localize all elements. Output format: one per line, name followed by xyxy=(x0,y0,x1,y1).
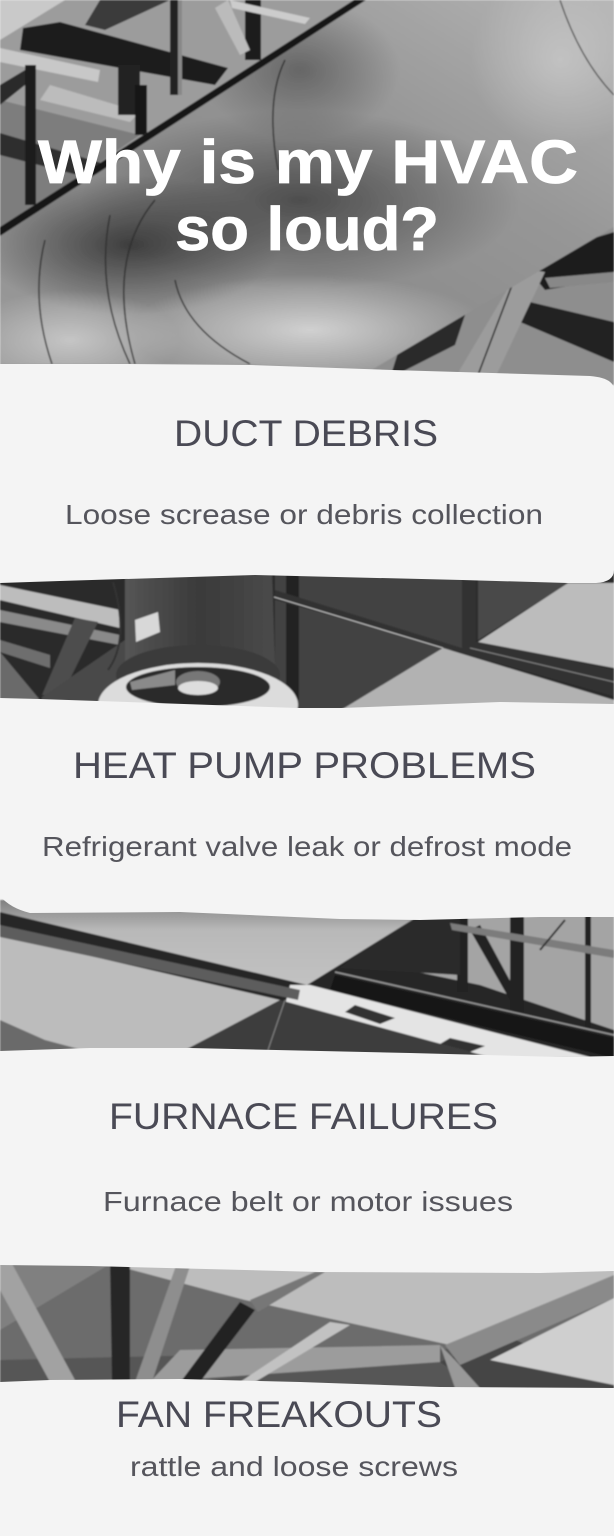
heading: duct debris: DUCT DEBRIS xyxy=(174,413,438,454)
heading: fan freakouts: FAN FREAKOUTS xyxy=(116,1394,442,1435)
duct xyxy=(0,0,614,372)
lower right steel xyxy=(368,225,614,385)
text: furnace description: Furnace belt or motor issues xyxy=(103,1186,513,1217)
text: heat pump description: Refrigerant valve leak or defrost mode xyxy=(42,831,572,862)
fan ring xyxy=(116,645,280,705)
text: duct debris description: Loose screase or debris collection xyxy=(65,499,543,530)
panel: heat pump problems xyxy=(0,698,614,920)
panel: fan freakouts xyxy=(0,1379,614,1536)
heading: furnace failures: FURNACE FAILURES xyxy=(109,1096,498,1137)
panel: duct debris xyxy=(0,364,614,583)
heading: heat pump problems: HEAT PUMP PROBLEMS xyxy=(73,745,536,786)
title: so loud? xyxy=(175,195,439,263)
fan cylinder xyxy=(125,570,275,665)
photo: overhead round duct and steel beams xyxy=(0,0,614,390)
photo: ceiling fan and square duct xyxy=(0,570,614,747)
text: fan description: rattle and loose screws xyxy=(130,1451,458,1482)
photo: angled duct and truss xyxy=(0,900,614,1060)
title: Why is my HVAC xyxy=(38,128,578,196)
title xyxy=(38,128,578,263)
photo: steel trusses under duct xyxy=(0,1258,614,1392)
dark square duct xyxy=(275,570,465,710)
light ceiling right xyxy=(341,648,614,712)
panel: furnace failures xyxy=(0,1048,614,1273)
